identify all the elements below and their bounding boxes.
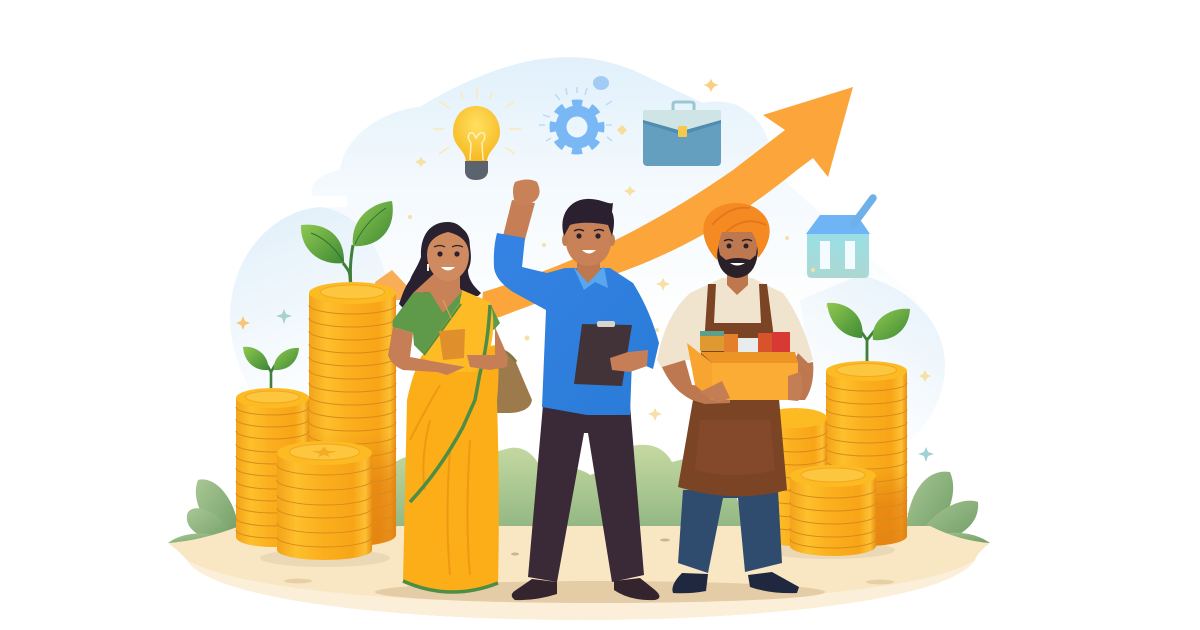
- growth arrow: [480, 87, 853, 320]
- coin stack: front right: [790, 465, 876, 556]
- coin stack: middle right: [763, 408, 827, 546]
- orange peak behind coins: [375, 270, 408, 300]
- hands: [700, 381, 730, 403]
- box: [687, 343, 798, 400]
- arms: [388, 327, 465, 375]
- shoes: [512, 579, 557, 600]
- shirt: [494, 233, 659, 415]
- neck: [727, 270, 748, 295]
- icon: gear: [539, 76, 627, 151]
- handbag: [484, 348, 532, 413]
- ground: [168, 526, 990, 620]
- clipboard: [574, 324, 632, 386]
- person: woman in yellow sari: [388, 222, 532, 592]
- trousers: [528, 405, 644, 582]
- head: [565, 212, 612, 266]
- sari skirt: [403, 345, 499, 592]
- raised forearm: [502, 200, 535, 243]
- turban: [703, 203, 770, 260]
- icon: briefcase: [643, 102, 721, 166]
- hair: [399, 222, 481, 310]
- sparkles scattered: [236, 157, 934, 462]
- hand: [610, 350, 648, 372]
- phone: [439, 329, 465, 360]
- right foliage: [905, 472, 990, 545]
- icon: sparkle: [703, 78, 719, 93]
- forearms: [662, 360, 730, 404]
- neck: [577, 258, 600, 283]
- face: [427, 229, 469, 281]
- seedling: tall stack: [301, 201, 393, 291]
- person: man with turban and apron: [657, 203, 813, 593]
- coin stack: tall left: [309, 282, 396, 546]
- seedling: right stack: [827, 303, 910, 367]
- icon: house with brush: [806, 198, 873, 278]
- coin stack: front left: [277, 441, 372, 560]
- jeans: [678, 490, 782, 573]
- seedling: small stack: [243, 347, 299, 394]
- pallu: [422, 290, 493, 372]
- collar: [573, 266, 608, 290]
- left foliage: [168, 479, 240, 545]
- bushes behind the people: [396, 445, 745, 527]
- icon: light bulb: [433, 87, 521, 180]
- coin stack: small left: [236, 388, 309, 547]
- person: man in blue shirt: [494, 180, 660, 600]
- background clouds: [230, 57, 945, 500]
- apron: [678, 284, 787, 496]
- shirt: [657, 278, 813, 370]
- sari folds and border: [410, 385, 470, 575]
- coin stack: tall right: [826, 361, 907, 546]
- face: [716, 224, 758, 276]
- neck and chest: [413, 270, 462, 313]
- blouse: [392, 290, 462, 356]
- fist: [513, 180, 540, 205]
- shoes: [672, 573, 708, 593]
- box contents: [700, 331, 790, 354]
